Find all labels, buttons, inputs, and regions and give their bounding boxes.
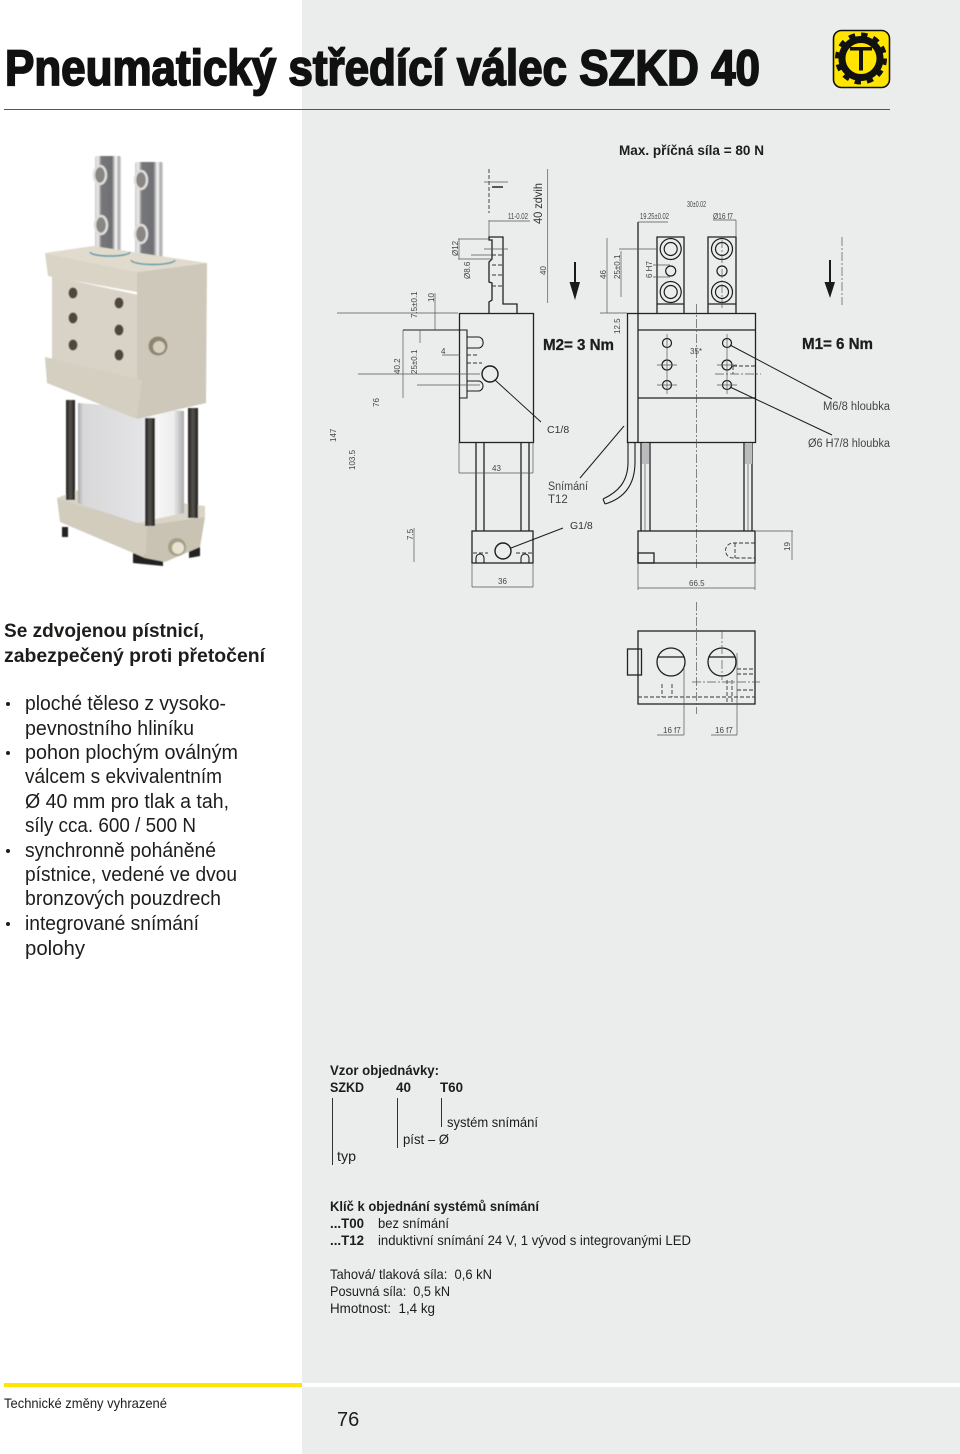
side view: dimension numbers: 10 xyxy=(427,293,436,302)
side view: dimension numbers: 43 xyxy=(492,464,501,473)
arrow: M2 direction xyxy=(570,262,580,300)
photo: mounting holes xyxy=(68,288,168,360)
sensing system key xyxy=(330,1198,691,1248)
bullet: sensing: polohy xyxy=(25,938,85,960)
bullet: drive: válcem s ekvivalentním xyxy=(25,766,222,788)
side view: dimension numbers: Ø12 xyxy=(451,240,460,256)
technical specifications: Posuvná síla: 0,5 kN xyxy=(330,1283,450,1299)
M1 torque label: M1= 6 Nm xyxy=(802,336,873,353)
front view: dimension numbers: 19.25±0.02 xyxy=(640,212,669,221)
side view: dimension numbers: Ø8.6 xyxy=(463,261,472,279)
subheading xyxy=(4,621,266,667)
order example: Vzor objednávky: xyxy=(330,1062,439,1078)
front view: body xyxy=(628,222,842,568)
footer band xyxy=(4,1383,960,1387)
callout: M6/8 depth: M6/8 hloubka xyxy=(823,401,891,413)
technical drawing: side view xyxy=(329,169,624,587)
side view: dimension lines xyxy=(337,169,548,587)
callout: G1/8 port: G1/8 xyxy=(570,520,593,532)
sensing system key: Klíč k objednání systémů snímání xyxy=(330,1198,540,1214)
bullet: drive: Ø 40 mm pro tlak a tah, xyxy=(25,791,229,813)
title: Pneumatický středící válec SZKD 40 xyxy=(5,40,760,96)
max transverse force label: Max. příčná síla = 80 N xyxy=(619,142,764,158)
technical drawing: front view xyxy=(599,200,891,590)
side view: dimension numbers: 147 xyxy=(329,428,338,442)
callout: Ø6 H7/8 depth xyxy=(730,387,891,450)
side view: dimension numbers: 7.5±0.1 xyxy=(410,291,419,318)
title rule xyxy=(4,109,890,110)
front view: rods and cable xyxy=(603,442,752,531)
right background panel xyxy=(302,0,960,1454)
front view: dimension numbers: 30±0.02 xyxy=(687,200,706,209)
bullet: drive: pohon plochým oválným xyxy=(25,742,238,764)
front view: dimension numbers: 35* xyxy=(690,347,702,356)
page number: 76 xyxy=(337,1409,359,1431)
bullet: piston rods: pístnice, vedené ve dvou xyxy=(25,864,237,886)
photo: bottom block xyxy=(57,490,205,566)
subheading: zabezpečený proti přetočení xyxy=(4,646,266,667)
callout: T12 sensing xyxy=(548,426,624,506)
side view: body xyxy=(403,314,534,442)
side view: dimension numbers: 36 xyxy=(498,577,507,586)
sensing system key: bez snímání xyxy=(378,1215,449,1231)
technical specifications xyxy=(330,1266,492,1316)
side view: dimension numbers: 40 zdvih xyxy=(531,183,545,224)
bullet: body: pevnostního hliníku xyxy=(25,718,194,740)
product photo xyxy=(45,156,207,566)
front view: mounting holes xyxy=(657,334,737,394)
order example: T60 xyxy=(440,1079,463,1095)
front view: dimension numbers: 25±0.1 xyxy=(613,254,622,279)
technical specifications: Tahová/ tlaková síla: 0,6 kN xyxy=(330,1266,492,1282)
front view: dimension numbers: 19 xyxy=(783,542,792,551)
callout: M6/8 depth xyxy=(730,345,891,413)
order example xyxy=(330,1062,538,1165)
order example: 40 xyxy=(396,1079,411,1095)
front view: dimension numbers: 6 H7 xyxy=(645,261,654,278)
bullet: sensing: integrované snímání xyxy=(25,913,199,935)
order example: SZKD xyxy=(330,1079,364,1095)
bullet: body xyxy=(6,693,226,740)
bullet: piston rods xyxy=(6,840,237,910)
bullet: drive: síly cca. 600 / 500 N xyxy=(25,815,196,837)
front view: dimension numbers: 12.5 xyxy=(613,318,622,334)
sensing system key: ...T00 xyxy=(330,1215,364,1231)
side view: dimension numbers: 40.2 xyxy=(393,358,402,374)
photo: pistons xyxy=(94,156,163,267)
feature list xyxy=(6,693,238,960)
side view: piston xyxy=(484,169,517,313)
front view: dimension numbers: 66.5 xyxy=(689,579,705,588)
technical drawing: bottom view: 16 f7 xyxy=(715,726,733,735)
subheading: Se zdvojenou pístnicí, xyxy=(4,621,204,642)
photo: main body xyxy=(45,246,207,419)
order example: systém snímání xyxy=(447,1114,538,1130)
side view: dimension numbers xyxy=(329,183,548,586)
side view: dimension numbers: 40 xyxy=(539,266,548,275)
side view: dimension numbers: 25±0.1 xyxy=(410,349,419,374)
bullet: piston rods: synchronně poháněné xyxy=(25,840,216,862)
callout: G1/8 port xyxy=(511,520,593,548)
order example: píst – Ø xyxy=(403,1131,449,1147)
technical specifications: Hmotnost: 1,4 kg xyxy=(330,1300,435,1316)
bullet: sensing xyxy=(6,913,199,960)
footer note: Technické změny vyhrazené xyxy=(4,1395,167,1411)
side view: rods and lower block xyxy=(472,442,533,563)
front view: dimension lines xyxy=(600,220,793,590)
sensing system key: induktivní snímání 24 V, 1 vývod s integrovanými LED xyxy=(378,1232,691,1248)
side view: dimension numbers: 11-0.02 xyxy=(508,212,528,221)
callout: Ø6 H7/8 depth: Ø6 H7/8 hloubka xyxy=(808,438,891,450)
bullet: piston rods: bronzových pouzdrech xyxy=(25,888,221,910)
front view: dimension numbers xyxy=(599,200,792,588)
callout: T12 sensing: Snímání xyxy=(548,481,589,493)
photo: blue piston seals xyxy=(90,252,175,264)
icon: company logo xyxy=(834,30,890,88)
front view: dimension numbers: 46 xyxy=(599,270,608,279)
side view: dimension numbers: 103.5 xyxy=(348,449,357,470)
M2 torque label: M2= 3 Nm xyxy=(543,337,614,354)
callout: T12 sensing: T12 xyxy=(548,494,568,506)
side view: dimension numbers: 76 xyxy=(372,398,381,407)
callout: C1/8 port xyxy=(495,380,569,436)
photo: cylinder and tie rods xyxy=(66,400,198,526)
technical drawing: bottom view xyxy=(628,602,760,735)
order example: typ xyxy=(337,1148,356,1164)
front view: pistons xyxy=(657,237,736,313)
callout: C1/8 port: C1/8 xyxy=(547,424,569,436)
side view: dimension numbers: 4 xyxy=(441,347,446,356)
side view: dimension numbers: 7.5 xyxy=(406,528,415,540)
bullet: drive xyxy=(6,742,238,837)
technical drawing: bottom view: 16 f7 xyxy=(663,726,681,735)
front view: dimension numbers: Ø16 f7 xyxy=(713,212,733,221)
arrow: M1 direction xyxy=(824,260,835,298)
sensing system key: ...T12 xyxy=(330,1232,364,1248)
bullet: body: ploché těleso z vysoko- xyxy=(25,693,226,715)
front view: lower block xyxy=(638,531,755,563)
